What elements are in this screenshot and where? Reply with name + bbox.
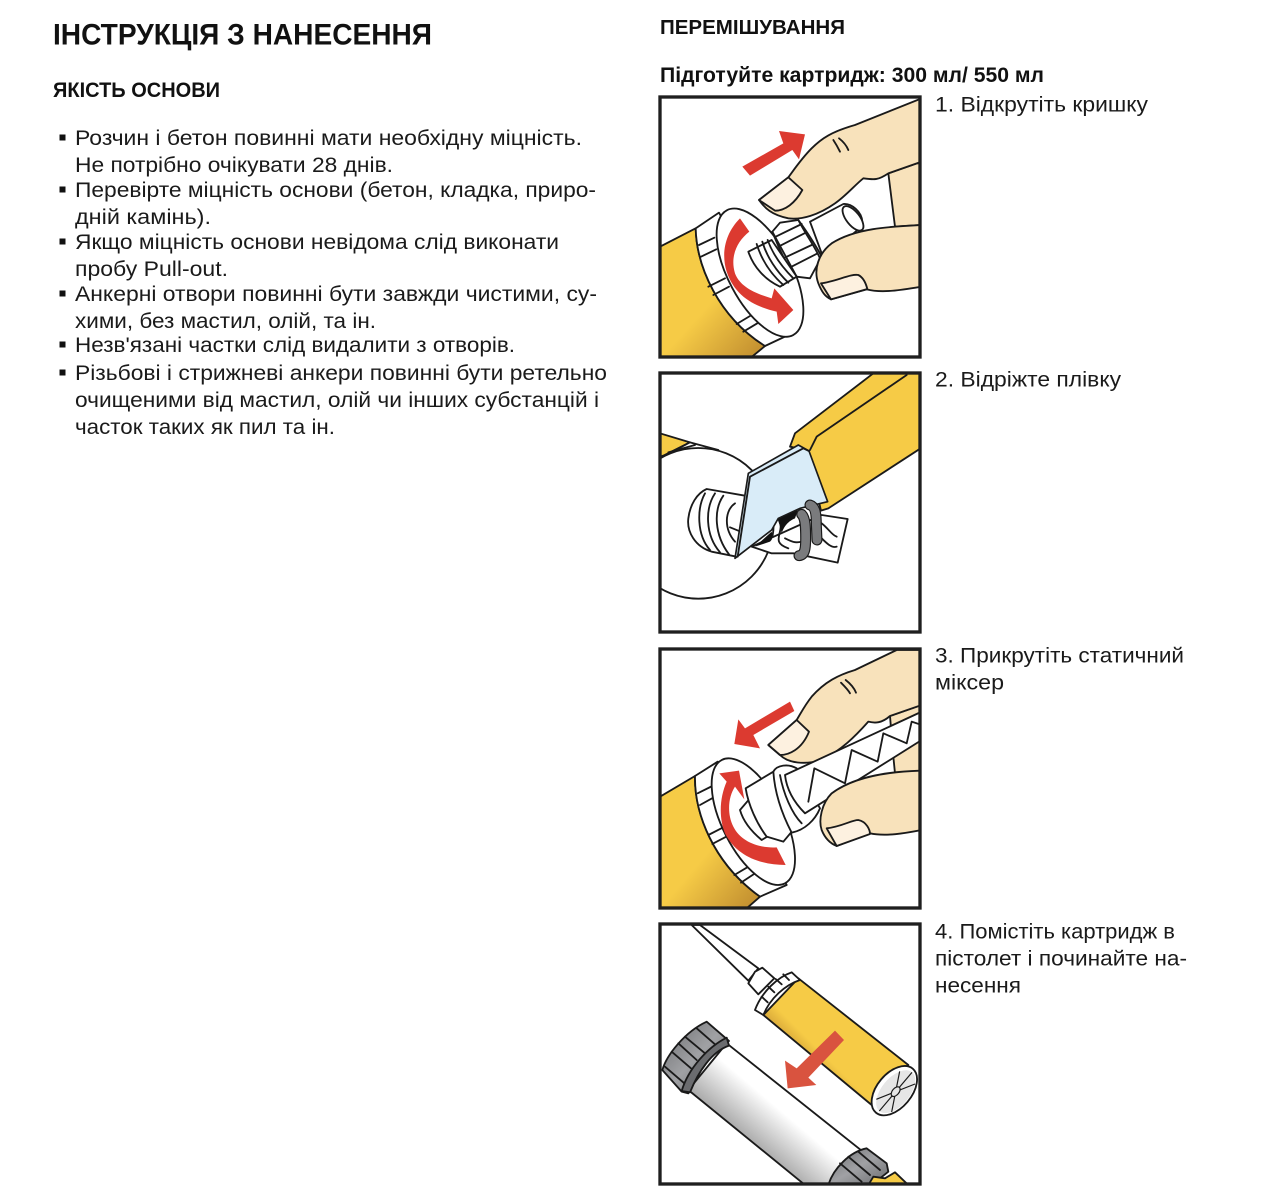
title: ІНСТРУКЦІЯ З НАНЕСЕННЯ: [53, 18, 432, 52]
bullet list: substrate quality: Анкерні отвори повинні бути завжди чистими, су-: [75, 283, 597, 306]
step 4 illustration: place cartridge in gun: [660, 924, 926, 1185]
bullet list: substrate quality: Перевірте міцність основи (бетон, кладка, приро-: [75, 179, 596, 202]
step 1 illustration: open the cap: [660, 97, 922, 358]
bullet list: substrate quality: [60, 127, 607, 439]
heading: prepare cartridge: Підготуйте картридж: 300 мл/ 550 мл: [660, 64, 1044, 87]
step 3 illustration: screw on static mixer: [660, 649, 922, 908]
step 1 text: 1. Відкрутіть кришку: [935, 94, 1149, 116]
step 3 text: міксер: [935, 672, 1004, 694]
bullet list: substrate quality: Розчин і бетон повинні мати необхідну міцність.: [75, 127, 582, 150]
heading: mixing: ПЕРЕМІШУВАННЯ: [660, 16, 845, 39]
bullet list: substrate quality: Не потрібно очікувати 28 днів.: [75, 154, 393, 177]
step 4 text: 4. Помістіть картридж в: [935, 920, 1175, 944]
bullet list: substrate quality: часток таких як пил та ін.: [75, 416, 335, 439]
step 2 illustration: cut the foil: [658, 371, 922, 634]
step 4 text: пістолет і починайте на-: [935, 948, 1187, 970]
step 2 text: 2. Відріжте плівку: [935, 368, 1122, 392]
bullet list: substrate quality: Якщо міцність основи невідома слід виконати: [75, 231, 559, 254]
step 4 text: [935, 920, 1187, 998]
bullet list: substrate quality: Різьбові і стрижневі анкери повинні бути ретельно: [75, 362, 607, 385]
bullet list: substrate quality: хими, без мастил, олій, та ін.: [75, 310, 376, 333]
step 3 text: 3. Прикрутіть статичний: [935, 644, 1184, 668]
heading: substrate quality: ЯКІСТЬ ОСНОВИ: [53, 79, 220, 102]
bullet list: substrate quality: Незв'язані частки слід видалити з отворів.: [75, 334, 515, 357]
step 3 text: [935, 644, 1184, 694]
bullet list: substrate quality: дній камінь).: [75, 206, 211, 229]
bullet list: substrate quality: очищеними від мастил, олій чи інших субстанцій і: [75, 389, 599, 412]
bullet list: substrate quality: пробу Pull-out.: [75, 258, 228, 281]
step 4 text: несення: [935, 974, 1021, 998]
